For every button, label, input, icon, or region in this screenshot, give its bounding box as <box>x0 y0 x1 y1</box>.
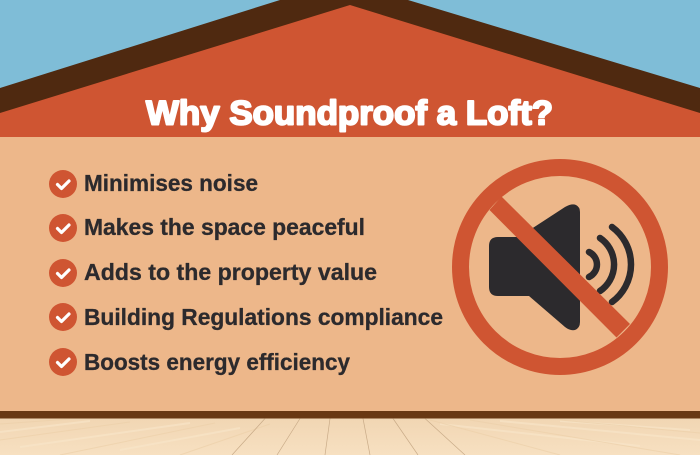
wall panel <box>0 137 700 411</box>
speaker body <box>489 204 580 330</box>
benefits list <box>49 170 443 376</box>
sound waves <box>589 227 631 302</box>
wooden floor <box>0 418 700 455</box>
roof beam <box>0 0 700 114</box>
item: boosts energy efficiency: Boosts energy efficiency <box>84 349 350 375</box>
item: minimises noise: Minimises noise <box>84 170 258 196</box>
item: building regulations compliance: Building Regulations compliance <box>84 304 443 330</box>
gable wall panel <box>0 5 700 137</box>
item: adds to the property value: Adds to the property value <box>84 259 377 285</box>
icon: muted speaker <box>460 168 660 366</box>
item: makes the space peaceful: Makes the space peaceful <box>84 214 365 240</box>
skirting board <box>0 411 700 418</box>
sky background <box>0 0 700 140</box>
prohibition sign <box>460 168 660 366</box>
title: Why Soundproof a Loft? <box>146 94 553 132</box>
